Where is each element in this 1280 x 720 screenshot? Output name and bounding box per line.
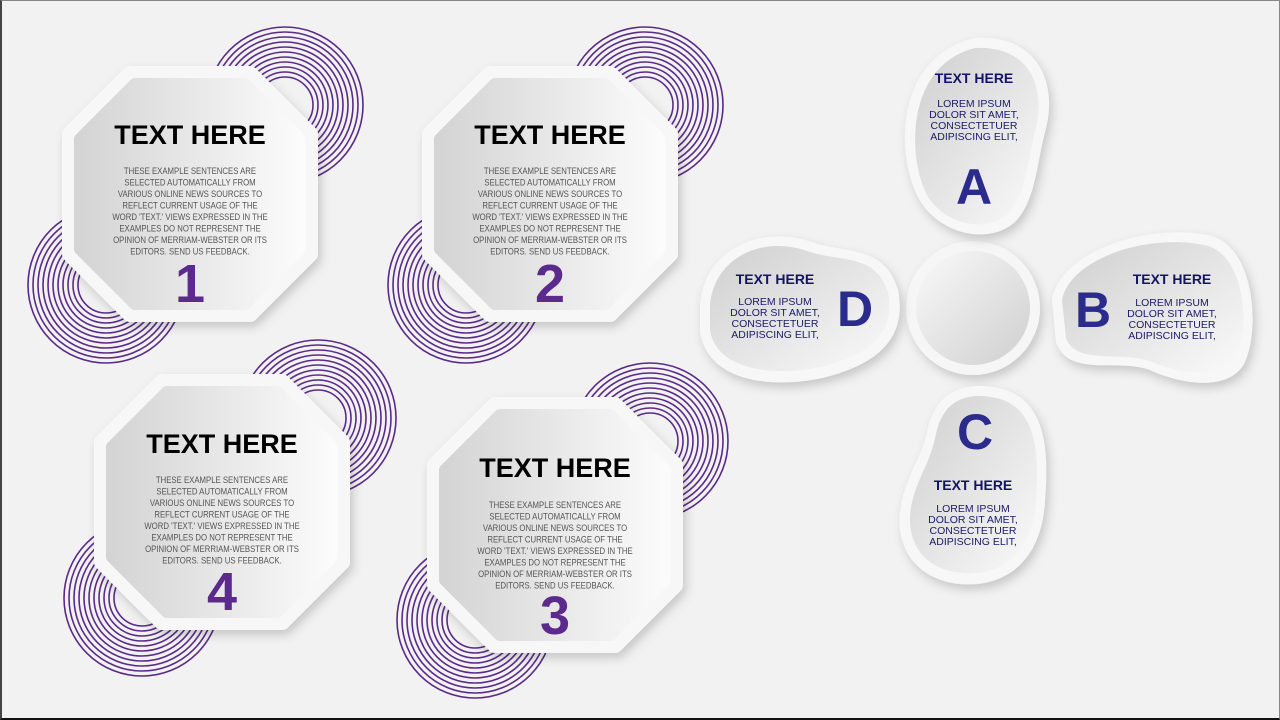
- panel: blob C: [899, 386, 1046, 584]
- letter B: B: [1075, 282, 1111, 338]
- panel: card 4: [102, 382, 342, 622]
- panel: card 3: [435, 405, 675, 646]
- panel: blob A: [905, 38, 1049, 234]
- title A: TEXT HERE: [935, 70, 1013, 86]
- text block 1: SELECTED AUTOMATICALLY FROM: [124, 177, 256, 188]
- heading 1: TEXT HERE: [114, 120, 266, 150]
- title C: TEXT HERE: [934, 477, 1012, 493]
- text block 2: OPINION OF MERRIAM-WEBSTER OR ITS: [473, 234, 627, 245]
- rings: card 3: [397, 363, 728, 698]
- text block 1: REFLECT CURRENT USAGE OF THE: [122, 200, 258, 211]
- text D: ADIPISCING ELIT,: [731, 329, 819, 341]
- text A: LOREM IPSUM: [937, 98, 1011, 110]
- text block 3: REFLECT CURRENT USAGE OF THE: [487, 534, 623, 545]
- text block 4: WORD 'TEXT.' VIEWS EXPRESSED IN THE: [144, 520, 300, 531]
- number 3: 3: [540, 586, 570, 646]
- rings: card 1: [28, 27, 363, 363]
- text block 1: WORD 'TEXT.' VIEWS EXPRESSED IN THE: [112, 211, 268, 222]
- heading 4: TEXT HERE: [146, 429, 298, 459]
- text block 2: THESE EXAMPLE SENTENCES ARE: [484, 165, 616, 176]
- text block 2: SELECTED AUTOMATICALLY FROM: [484, 177, 616, 188]
- text block 4: OPINION OF MERRIAM-WEBSTER OR ITS: [145, 543, 299, 554]
- heading 2: TEXT HERE: [474, 120, 626, 150]
- text C: DOLOR SIT AMET,: [928, 514, 1018, 526]
- title D: TEXT HERE: [736, 271, 814, 287]
- text B: DOLOR SIT AMET,: [1127, 308, 1217, 320]
- rings: card 4: [64, 340, 396, 676]
- text block 4: VARIOUS ONLINE NEWS SOURCES TO: [150, 497, 294, 508]
- text block 4: REFLECT CURRENT USAGE OF THE: [154, 509, 290, 520]
- text block 4: EDITORS. SEND US FEEDBACK.: [162, 555, 282, 566]
- text block 4: SELECTED AUTOMATICALLY FROM: [156, 486, 288, 497]
- panel: card 1: [70, 74, 310, 314]
- text D: LOREM IPSUM: [738, 296, 812, 308]
- letter C: C: [957, 404, 993, 460]
- rings: card 2: [388, 27, 723, 363]
- text block 3: OPINION OF MERRIAM-WEBSTER OR ITS: [478, 568, 632, 579]
- text block 2: EDITORS. SEND US FEEDBACK.: [490, 246, 610, 257]
- panel: blob B: [1052, 232, 1253, 383]
- text block 4: [144, 474, 300, 566]
- text A: DOLOR SIT AMET,: [929, 109, 1019, 121]
- number 1: 1: [175, 254, 205, 314]
- text block 3: EXAMPLES DO NOT REPRESENT THE: [484, 557, 626, 568]
- text block 4: THESE EXAMPLE SENTENCES ARE: [156, 474, 288, 485]
- text block 1: [112, 165, 268, 257]
- text block 3: [477, 499, 633, 591]
- text block 3: WORD 'TEXT.' VIEWS EXPRESSED IN THE: [477, 545, 633, 556]
- text block 3: SELECTED AUTOMATICALLY FROM: [489, 511, 621, 522]
- text block 3: THESE EXAMPLE SENTENCES ARE: [489, 499, 621, 510]
- panel: blob D: [700, 236, 900, 382]
- text block 2: [472, 165, 628, 257]
- heading 3: TEXT HERE: [479, 453, 631, 483]
- text block 3: EDITORS. SEND US FEEDBACK.: [495, 580, 615, 591]
- letter D: D: [837, 281, 873, 337]
- text B: LOREM IPSUM: [1135, 297, 1209, 309]
- text C: LOREM IPSUM: [936, 503, 1010, 515]
- text block 2: REFLECT CURRENT USAGE OF THE: [482, 200, 618, 211]
- text block 1: EXAMPLES DO NOT REPRESENT THE: [119, 223, 261, 234]
- number 2: 2: [535, 254, 565, 314]
- text B: CONSECTETUER: [1129, 319, 1216, 331]
- letter A: A: [956, 159, 992, 215]
- text block 2: WORD 'TEXT.' VIEWS EXPRESSED IN THE: [472, 211, 628, 222]
- text block 1: VARIOUS ONLINE NEWS SOURCES TO: [118, 188, 262, 199]
- text block 1: OPINION OF MERRIAM-WEBSTER OR ITS: [113, 234, 267, 245]
- text C: ADIPISCING ELIT,: [929, 536, 1017, 548]
- text C: CONSECTETUER: [930, 525, 1017, 537]
- title B: TEXT HERE: [1133, 271, 1211, 287]
- text block 1: THESE EXAMPLE SENTENCES ARE: [124, 165, 256, 176]
- text block 2: EXAMPLES DO NOT REPRESENT THE: [479, 223, 621, 234]
- text B: ADIPISCING ELIT,: [1128, 330, 1216, 342]
- text block 3: VARIOUS ONLINE NEWS SOURCES TO: [483, 522, 627, 533]
- text A: ADIPISCING ELIT,: [930, 131, 1018, 143]
- text block 1: EDITORS. SEND US FEEDBACK.: [130, 246, 250, 257]
- panel: card 2: [430, 74, 670, 314]
- text D: DOLOR SIT AMET,: [730, 307, 820, 319]
- text block 4: EXAMPLES DO NOT REPRESENT THE: [151, 532, 293, 543]
- center circle: [906, 241, 1040, 375]
- text block 2: VARIOUS ONLINE NEWS SOURCES TO: [478, 188, 622, 199]
- text D: CONSECTETUER: [732, 318, 819, 330]
- number 4: 4: [207, 562, 237, 622]
- text A: CONSECTETUER: [931, 120, 1018, 132]
